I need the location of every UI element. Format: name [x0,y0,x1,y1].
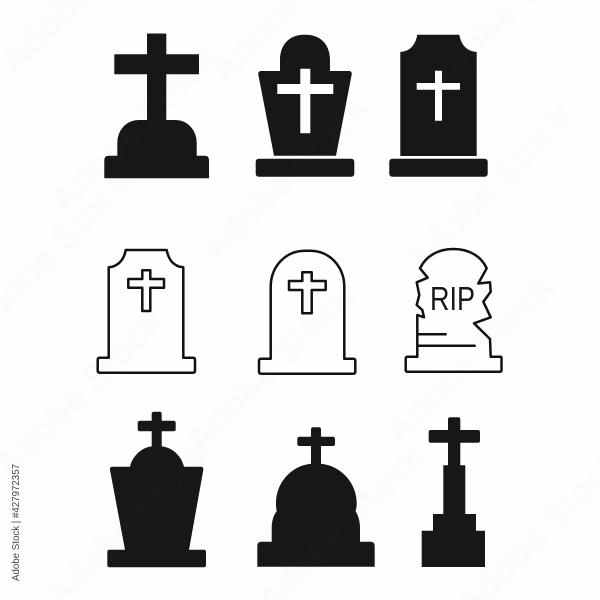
watermark: Adobe Stock repeats: Adobe Stock [397,95,582,281]
text: RIP: RIP [430,280,475,317]
watermark: Adobe Stock repeats: Adobe Stock [42,35,227,221]
text: stock image credit: Adobe Stock | #427972357 [10,464,22,581]
icon: outlined rounded headstone [259,251,355,374]
watermark: Adobe Stock repeats: Adobe Stock [377,265,562,451]
watermark: Adobe Stock repeats: Adobe Stock [192,85,377,271]
watermark: Adobe Stock repeats: Adobe Stock [177,275,362,461]
icon: cracked outlined RIP headstone [406,249,502,372]
icon: shouldered headstone with white cross [389,35,488,177]
icon: tapered gravestone with dome and cross [107,412,206,567]
icon: domed grave with cross [257,427,375,567]
icon: cross on mound gravestone [105,34,208,178]
icon: outlined shouldered headstone [98,250,195,373]
icon: stepped plinth with cross [422,417,485,567]
icon: tapered headstone with white cross [256,35,354,177]
